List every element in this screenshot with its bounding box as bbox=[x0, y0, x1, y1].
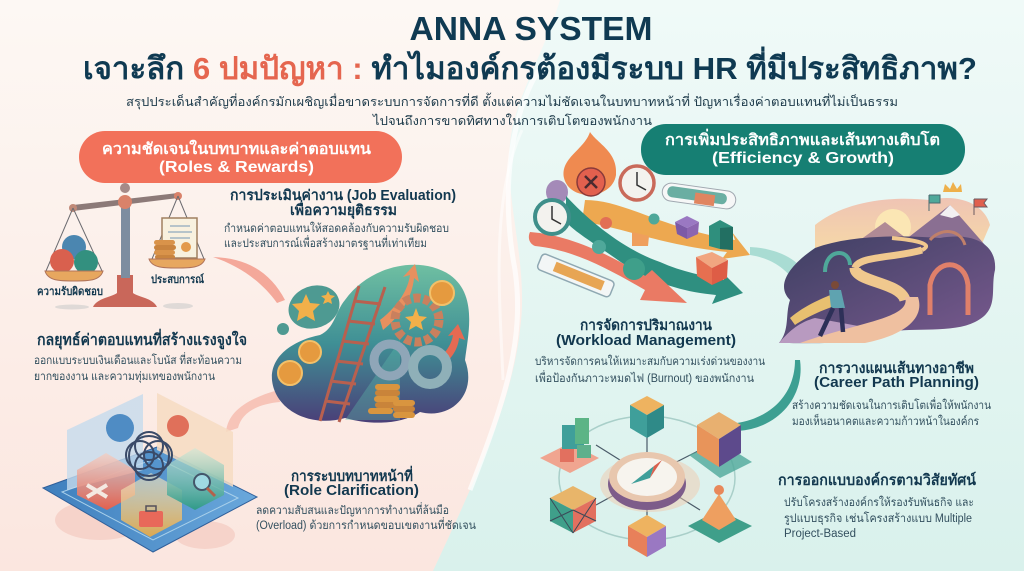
text block: career path planning: การวางแผนเส้นทางอาชีพ bbox=[819, 360, 974, 377]
text block: vision org design: รูปแบบธุรกิจ เช่นโครงสร้างแบบ Multiple bbox=[784, 511, 972, 525]
text block: career path planning bbox=[792, 360, 991, 428]
text block: workload management: บริหารจัดการคนให้เหมาะสมกับความเร่งด่วนของงาน bbox=[535, 355, 765, 368]
icon: compass and org cubes bbox=[540, 396, 752, 557]
text block: job evaluation: กำหนดค่าตอบแทนให้สอดคล้องกับความรับผิดชอบ bbox=[224, 222, 449, 235]
text block: career path planning: มองเห็นอนาคตและความก้าวหน้าในองค์กร bbox=[792, 413, 979, 428]
connector: right top bbox=[750, 247, 803, 280]
text block: job evaluation bbox=[224, 187, 456, 250]
icon: career path landscape bbox=[779, 182, 995, 343]
panel header: roles and rewards bbox=[79, 131, 402, 183]
panel header: roles and rewards: ความชัดเจนในบทบาทและค่าตอบแทน bbox=[102, 139, 371, 158]
panel header: efficiency and growth: การเพิ่มประสิทธิภาพและเส้นทางเติบโต bbox=[665, 128, 940, 149]
icon: motivation ladder and coins bbox=[272, 264, 469, 423]
connector: left top bbox=[213, 257, 285, 303]
label: experience: ประสบการณ์ bbox=[151, 273, 205, 286]
text block: job evaluation: เพื่อความยุติธรรม bbox=[290, 199, 397, 219]
text block: vision org design: Project-Based bbox=[784, 528, 856, 540]
label: responsibility: ความรับผิดชอบ bbox=[37, 285, 103, 298]
icon: workload streams bbox=[529, 132, 750, 304]
text block: pay strategy: ยากของงาน และความทุ่มเทของพนักงาน bbox=[34, 371, 215, 383]
intro text bbox=[126, 92, 898, 128]
text block: role clarification: (Overload) ด้วยการกำหนดขอบเขตงานที่ชัดเจน bbox=[256, 517, 476, 532]
text block: workload management: (Workload Management) bbox=[556, 333, 736, 349]
text block: role clarification: (Role Clarification) bbox=[284, 483, 419, 499]
text block: vision org design: ปรับโครงสร้างองค์กรให้รองรับพันธกิจ และ bbox=[784, 495, 974, 509]
icon: balance scale bbox=[45, 183, 205, 310]
subtitle heading: เจาะลึก 6 ปมปัญหา : ทำไมองค์กรต้องมีระบบ HR ที่มีประสิทธิภาพ? bbox=[83, 46, 977, 87]
panel header: efficiency and growth bbox=[641, 124, 965, 175]
text block: job evaluation: และประสบการณ์เพื่อสร้างมาตรฐานที่เท่าเทียม bbox=[224, 235, 427, 250]
text block: vision org design bbox=[778, 471, 977, 540]
text block: role clarification: การระบบทบาทหน้าที่ bbox=[291, 465, 413, 485]
text block: pay strategy: กลยุทธ์ค่าตอบแทนที่สร้างแรงจูงใจ bbox=[37, 328, 247, 351]
connector: left bottom bbox=[226, 390, 280, 432]
text block: workload management bbox=[535, 317, 765, 385]
text block: career path planning: (Career Path Planning) bbox=[814, 375, 979, 391]
text block: workload management: เพื่อป้องกันภาวะหมดไฟ (Burnout) ของพนักงาน bbox=[535, 370, 754, 385]
intro text: ไปจนถึงการขาดทิศทางในการเติบโตของพนักงาน bbox=[372, 113, 652, 128]
text block: workload management: การจัดการปริมาณงาน bbox=[580, 317, 712, 334]
text block: pay strategy: ออกแบบระบบเงินเดือนและโบนัส ที่สะท้อนความ bbox=[34, 352, 242, 367]
text block: vision org design: การออกแบบองค์กรตามวิสัยทัศน์ bbox=[778, 471, 977, 489]
intro text: สรุปประเด็นสำคัญที่องค์กรมักเผชิญเมื่อขาดระบบการจัดการที่ดี ตั้งแต่ความไม่ชัดเจนในบทบาทหน้าที่ ปัญหาเรื่องค่าตอบแทนที่ไม่เป็นธรรม bbox=[126, 92, 898, 110]
panel header: efficiency and growth: (Efficiency & Growth) bbox=[712, 150, 894, 167]
panel header: roles and rewards: (Roles & Rewards) bbox=[159, 159, 314, 176]
text block: job evaluation: การประเมินค่างาน (Job Evaluation) bbox=[230, 187, 456, 204]
text block: career path planning: สร้างความชัดเจนในการเติบโตเพื่อให้พนักงาน bbox=[792, 397, 991, 412]
connector: right bottom bbox=[737, 360, 801, 431]
title: ANNA SYSTEM bbox=[410, 10, 652, 47]
text block: role clarification bbox=[256, 465, 476, 532]
text block: pay strategy bbox=[34, 328, 247, 383]
icon: role clarification board bbox=[43, 393, 257, 552]
text block: role clarification: ลดความสับสนและปัญหาการทำงานที่ล้นมือ bbox=[256, 502, 449, 517]
